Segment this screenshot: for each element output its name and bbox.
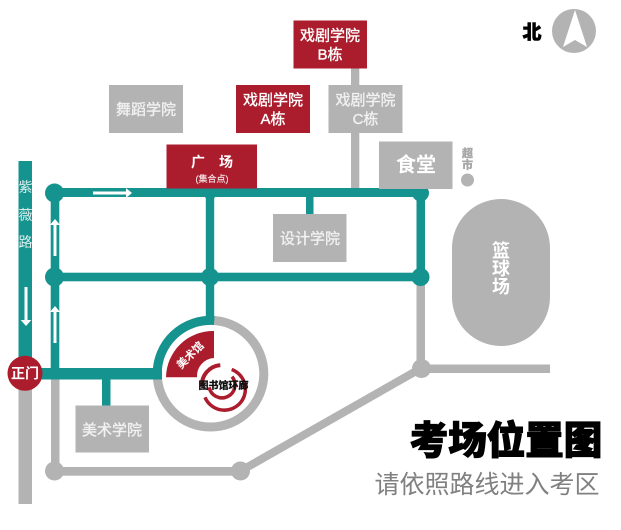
supermarket: 超市: 超 xyxy=(462,146,473,160)
teal roads xyxy=(18,161,430,406)
building: 美术学院: 美术学院 xyxy=(82,421,142,439)
compass icon xyxy=(552,9,596,53)
building: 设计学院: 设计学院 xyxy=(280,230,340,248)
road label: 紫薇路: 薇 xyxy=(18,207,32,223)
gray roads xyxy=(18,66,550,504)
building: 美术学院 xyxy=(76,406,149,452)
gray ring road xyxy=(157,320,264,427)
building: 设计学院 xyxy=(273,214,346,262)
building: 食堂 xyxy=(379,142,452,189)
supermarket: 超市: 市 xyxy=(462,158,473,172)
main gate: 正门: 正门 xyxy=(11,365,39,381)
road label: 紫薇路: 路 xyxy=(18,234,32,250)
art museum: 美术馆 xyxy=(166,331,214,377)
building: 戏剧学院 A栋 xyxy=(236,85,310,133)
building: 舞蹈学院: 舞蹈学院 xyxy=(116,100,176,118)
building: 舞蹈学院 xyxy=(109,85,183,133)
road label: 紫薇路 xyxy=(18,179,32,250)
building: 戏剧学院 B栋: 戏剧学院 xyxy=(300,26,360,44)
basketball court: 篮球场: 球 xyxy=(492,259,510,279)
assembly point: 广场: (集合点) xyxy=(196,173,228,184)
basketball court: 篮球场: 篮 xyxy=(492,240,510,261)
building: 戏剧学院 B栋 xyxy=(294,20,367,68)
title: 考场位置图 xyxy=(410,419,602,463)
road arrows xyxy=(21,188,132,343)
basketball court: 篮球场 xyxy=(452,199,550,346)
main gate: 正门 xyxy=(8,356,42,391)
building: 戏剧学院 C栋: C栋 xyxy=(353,110,378,128)
subtitle: 请依照路线进入考区 xyxy=(374,471,600,499)
building: 戏剧学院 A栋: A栋 xyxy=(260,110,286,128)
basketball court: 篮球场: 场 xyxy=(492,277,510,297)
assembly point: 广场 xyxy=(166,144,257,188)
library corridor: 图书馆环廊: 图书馆环廊 xyxy=(198,379,248,392)
assembly point: 广场: 广 场 xyxy=(191,154,233,170)
building: 戏剧学院 C栋 xyxy=(328,85,402,133)
building: 戏剧学院 A栋: 戏剧学院 xyxy=(243,91,303,109)
building: 戏剧学院 C栋: 戏剧学院 xyxy=(335,91,396,109)
building: 食堂: 食堂 xyxy=(396,152,436,176)
road label: 紫薇路: 紫 xyxy=(18,179,32,195)
supermarket: 超市 xyxy=(461,146,474,186)
building: 戏剧学院 B栋: B栋 xyxy=(317,46,343,64)
library corridor: 图书馆环廊 xyxy=(198,365,248,410)
north label: 北 xyxy=(522,22,542,44)
art museum: 美术馆: 美术馆 xyxy=(173,338,207,372)
